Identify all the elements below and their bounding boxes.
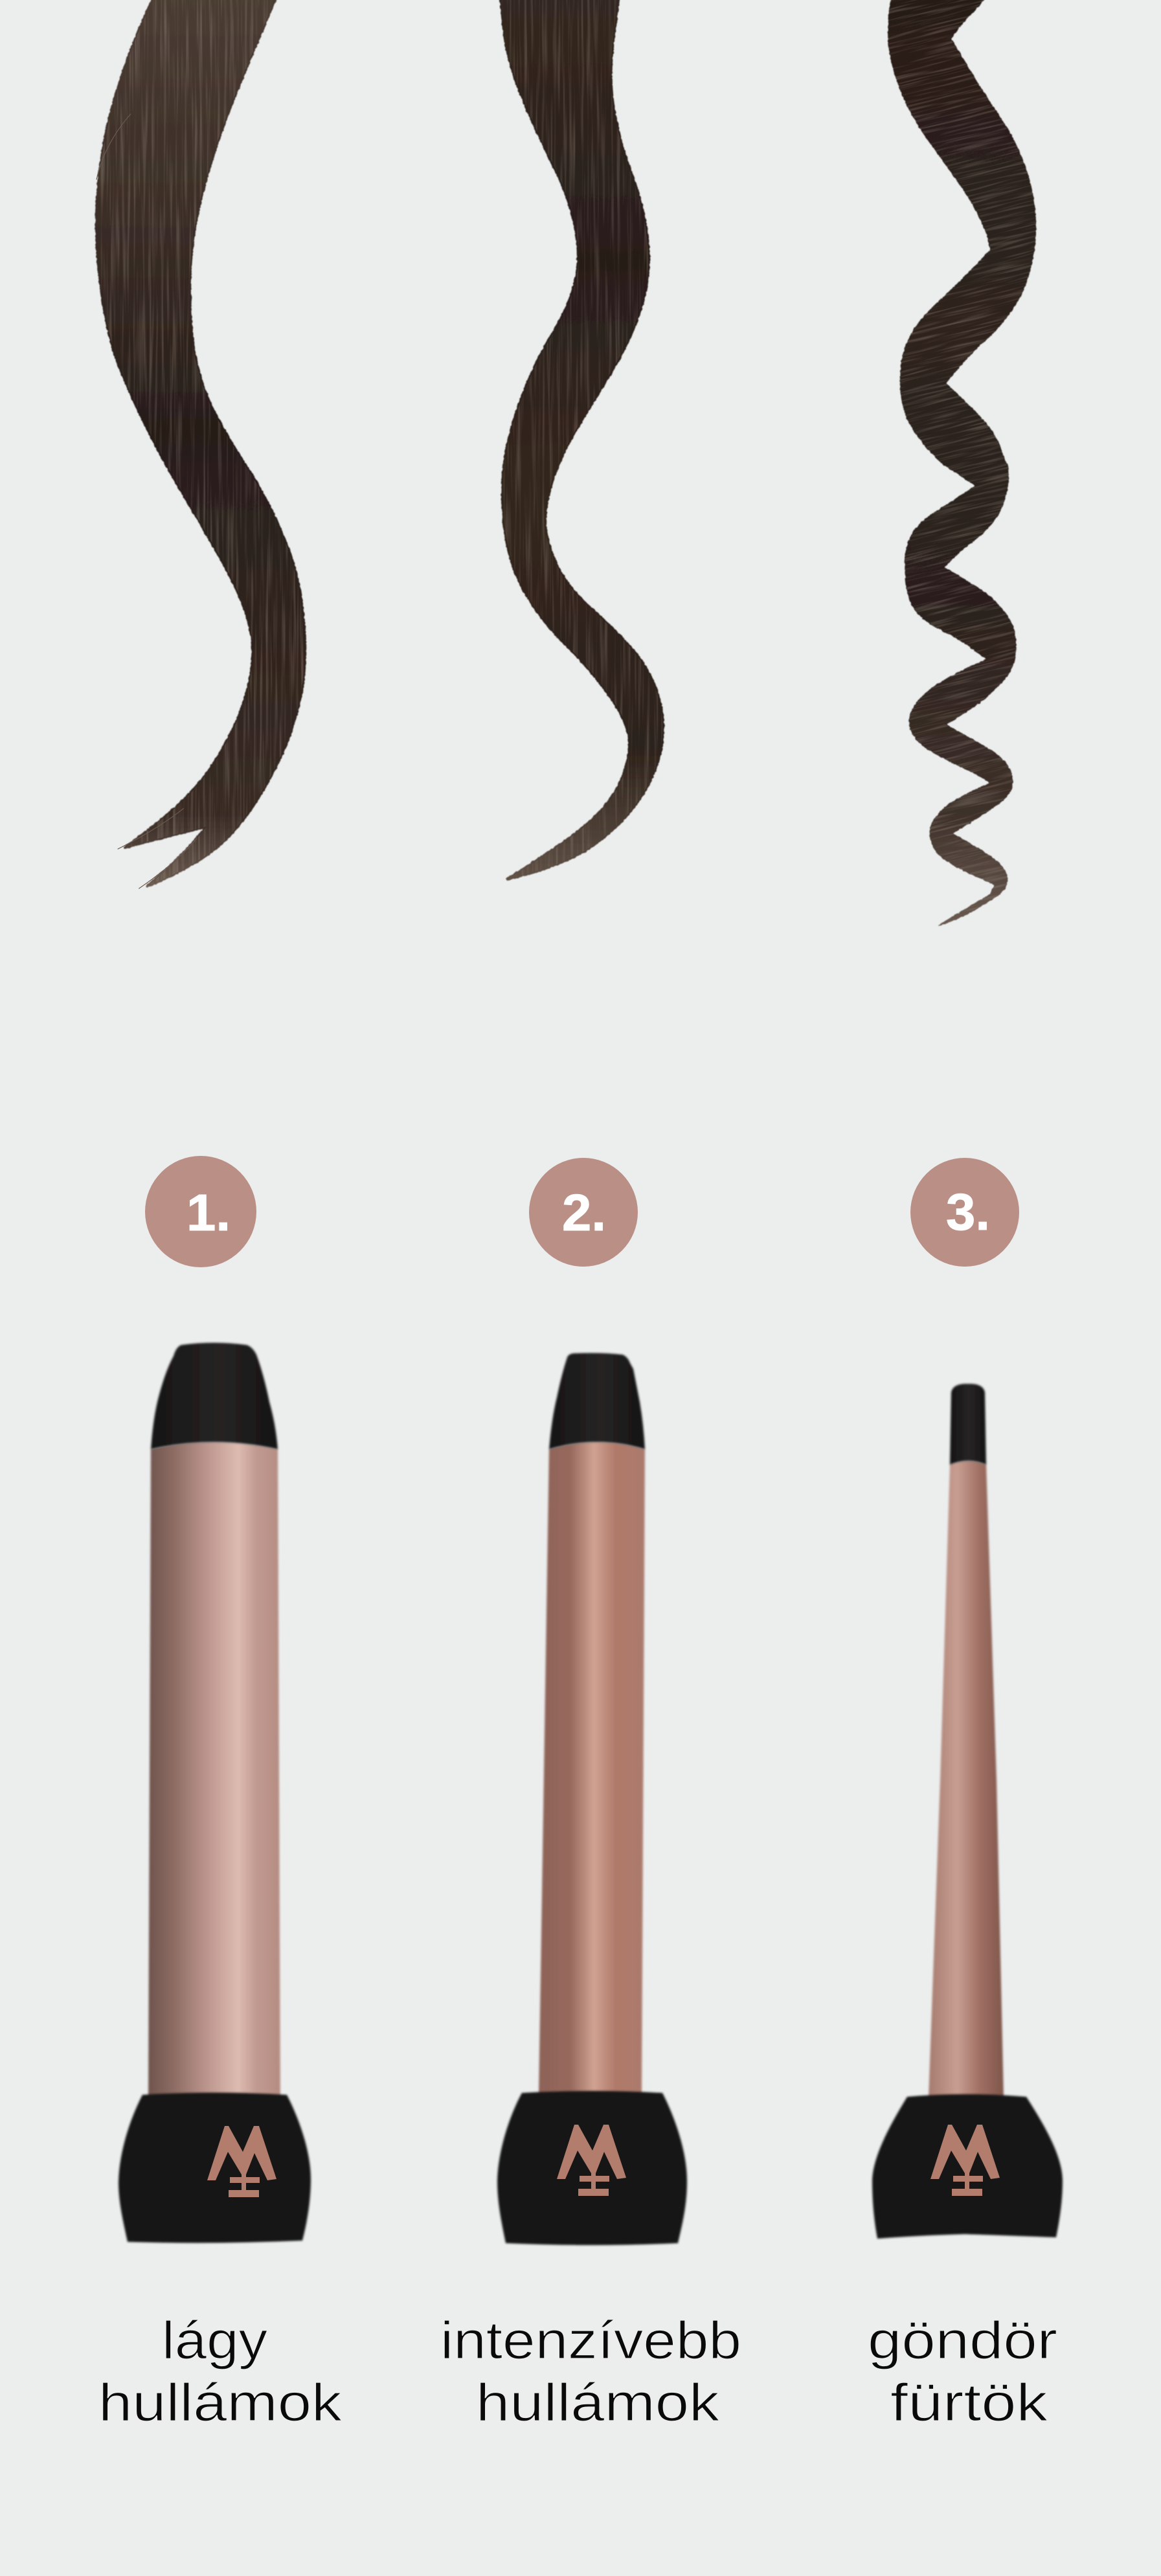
label 2: intenzívebb hullámok: intenzívebb [440,2311,741,2370]
label 1: lágy hullámok: lágy [162,2311,267,2370]
infographic canvas [94,0,1065,2421]
label 3: göndör fürtök [868,2311,1057,2432]
tip 1 [151,1343,278,1449]
curling wand 1 [118,1343,311,2243]
number badge 2: 2. [562,1184,606,1241]
logo 3 [930,2125,1000,2196]
base 1 [118,2093,311,2243]
logo 1 [207,2126,276,2197]
base 3 [872,2094,1063,2239]
number badge 1 [145,1156,256,1267]
label 1: lágy hullámok: hullámok [98,2373,343,2432]
tip 2 [549,1353,645,1449]
hair strand: intense waves [494,0,673,883]
barrel 2 [539,1442,645,2096]
hair strand: curls [887,0,1037,927]
barrel 3 [929,1461,1004,2098]
hair strand: soft waves [85,0,316,889]
barrel 1 [148,1442,280,2098]
number badge 3 [910,1158,1019,1267]
hair strands row [94,0,1037,927]
label 3: göndör fürtök: göndör [868,2311,1057,2370]
number badge 1: 1. [186,1184,231,1241]
tip 3 [950,1384,986,1465]
base 2 [497,2091,687,2245]
curling wand 2 [497,1353,687,2245]
label 2: intenzívebb hullámok [440,2311,741,2432]
curling wand 3 [872,1384,1063,2239]
number badge 3: 3. [946,1183,990,1241]
label 2: intenzívebb hullámok: hullámok [476,2373,720,2432]
label 1: lágy hullámok [98,2311,343,2432]
label 3: göndör fürtök: fürtök [890,2373,1048,2432]
number badge 2 [529,1158,638,1267]
logo 2 [557,2125,626,2196]
